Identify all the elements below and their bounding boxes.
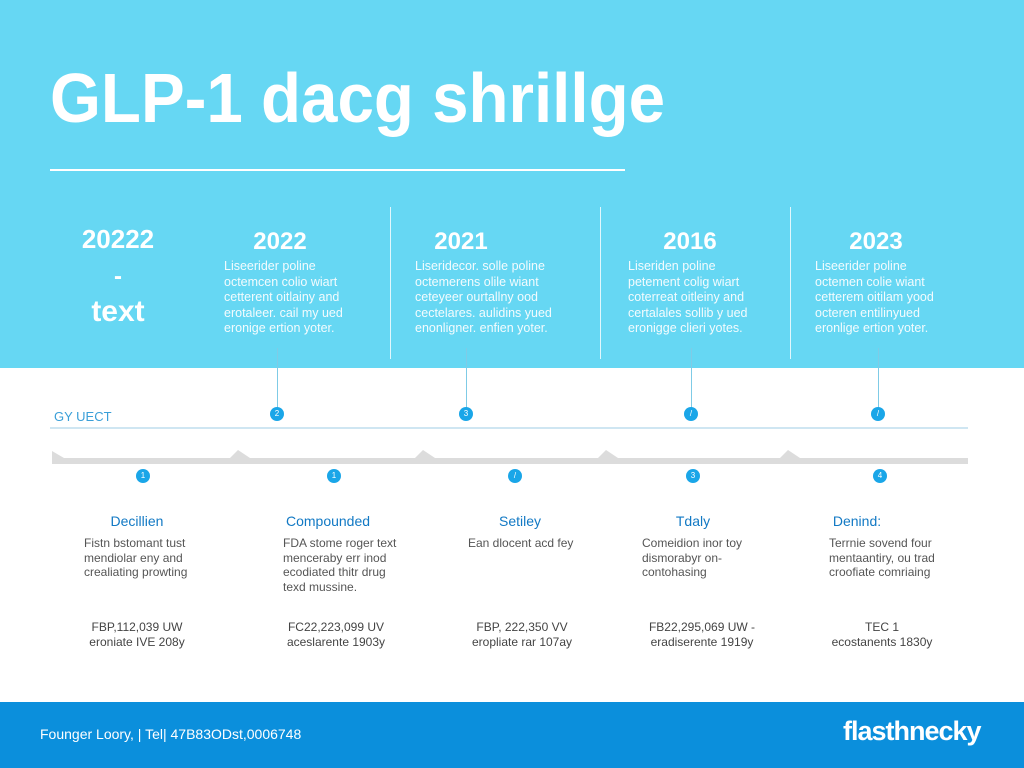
- text: Terrnie sovend four mentaantiry, ou trad croofiate comriaing: [829, 536, 935, 579]
- col 4: Tdaly: [676, 513, 710, 529]
- text: Fistn bstomant tust mendiolar eny and crealiating prowting: [84, 536, 187, 579]
- text: Ean dlocent acd fey: [468, 536, 573, 550]
- year 2022: 2022: [253, 228, 307, 255]
- text: eradiserente 1919y: [651, 635, 753, 649]
- text: ecostanents 1830y: [832, 635, 932, 649]
- year 2016: 2016: [663, 228, 717, 255]
- text: 3: [464, 409, 468, 418]
- col 3: Setiley: [499, 513, 541, 529]
- text: 1: [332, 471, 336, 480]
- lower dots: 1: [141, 471, 145, 480]
- intro column: [82, 224, 154, 328]
- text: FBP,112,039 UW: [92, 620, 182, 634]
- col 1: Decillien: [111, 513, 163, 529]
- year 2023: 2023: [849, 228, 903, 255]
- year 2021: 2021: [434, 228, 488, 255]
- text: 4: [878, 471, 882, 480]
- intro column: text: [91, 295, 145, 328]
- text: FBP, 222,350 VV: [476, 620, 568, 634]
- text 2016: Liseriden poline petement colig wiart coterreat oitleiny and certalales sollib y ued eronigge clieri yotes.: [628, 259, 748, 335]
- upper dots: 2: [275, 409, 279, 418]
- text: Comeidion inor toy dismorabyr on-contohasing: [642, 536, 742, 579]
- text 2021: Liseridecor. solle poline octemerens olile wiant ceteyeer ourtallny ood cectelares. aulidins yued enonligner. enfien yoter.: [415, 259, 552, 335]
- text: TEC 1: [865, 620, 899, 634]
- text: /: [514, 471, 516, 480]
- title: GLP-1 dacg shrillge: [50, 59, 665, 137]
- header band: [0, 0, 1024, 368]
- connectors: [277, 348, 278, 408]
- text: 3: [691, 471, 695, 480]
- text: /: [690, 409, 692, 418]
- lower dots: [136, 469, 150, 483]
- text: aceslarente 1903y: [287, 635, 385, 649]
- footer: [0, 702, 1024, 768]
- axis label: GY UECT: [54, 409, 112, 424]
- text: FB22,295,069 UW -: [649, 620, 755, 634]
- text 2023: Liseerider poline octemen colie wiant cetterem oitilam yood octeren entilinyued eronlige ertion yoter.: [815, 259, 934, 335]
- col 2: Compounded: [286, 513, 370, 529]
- text: FC22,223,099 UV: [288, 620, 384, 634]
- footer text: Founger Loory, | Tel| 47B83ODst,0006748: [40, 726, 301, 742]
- logo: flasthnecky: [843, 716, 981, 746]
- title underline: [50, 169, 625, 171]
- text 2022: Liseerider poline octemcen colio wiart cetterent oitlainy and erotaleer. cail my ued eronige ertion yoter.: [224, 259, 343, 335]
- intro column: -: [114, 263, 122, 290]
- text: eroniate IVE 208y: [89, 635, 185, 649]
- upper dots: [270, 407, 284, 421]
- text: /: [877, 409, 879, 418]
- col 5: Denind:: [833, 513, 881, 529]
- gray timeline bar: [52, 450, 968, 464]
- intro column: 20222: [82, 224, 154, 254]
- text: eropliate rar 107ay: [472, 635, 572, 649]
- text: FDA stome roger text menceraby err inod ecodiated thitr drug texd mussine.: [283, 536, 396, 594]
